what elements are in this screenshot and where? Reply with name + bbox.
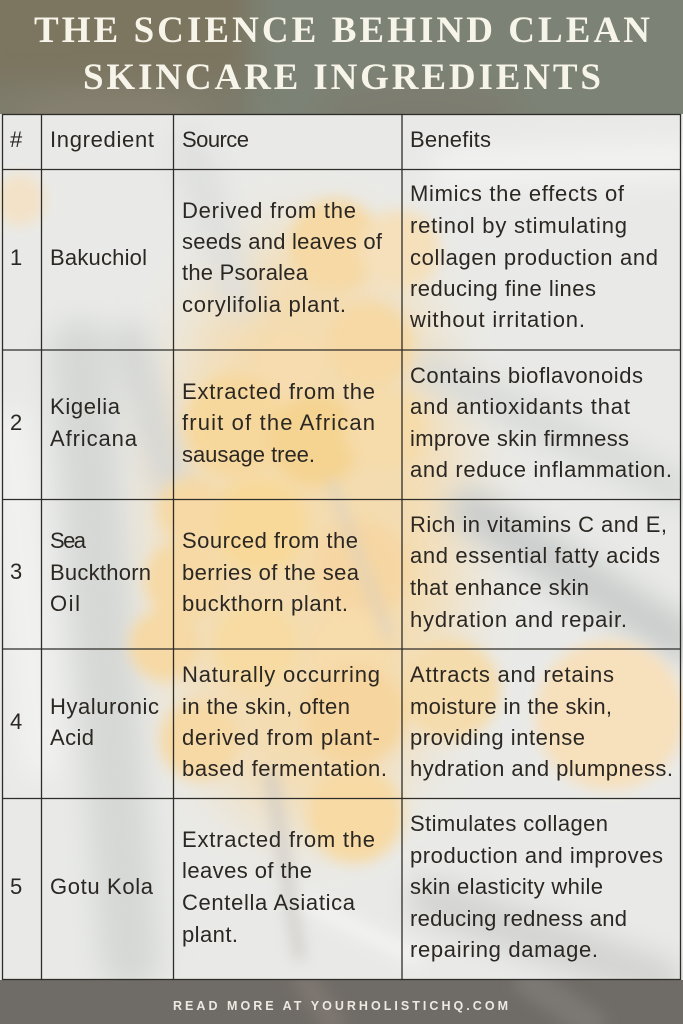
table header row: Ingredient: [50, 127, 154, 152]
benefits: Kigelia Africana: Contains bioflavonoids: [410, 363, 643, 388]
source: Sea Buckthorn Oil: buckthorn plant.: [182, 591, 348, 616]
row 2: Kigelia Africana: Africana: [50, 426, 138, 451]
row 3: Sea Buckthorn Oil: 3: [10, 559, 22, 584]
row 2: Kigelia Africana: 2: [10, 410, 22, 435]
benefits: Sea Buckthorn Oil: hydration and repair.: [410, 607, 627, 632]
footer band background: [0, 980, 683, 1024]
benefits: Hyaluronic Acid: hydration and plumpness.: [410, 756, 673, 781]
benefits: Gotu Kola: skin elasticity while: [410, 874, 603, 899]
source: Bakuchiol: Derived from the: [182, 198, 356, 223]
source: Sea Buckthorn Oil: [182, 528, 360, 616]
benefits: Gotu Kola: Stimulates collagen: [410, 811, 608, 836]
row 3: Sea Buckthorn Oil: Sea: [50, 528, 87, 553]
table header row: #: [10, 127, 23, 152]
benefits: Sea Buckthorn Oil: [410, 512, 667, 632]
source: Kigelia Africana: [182, 379, 375, 467]
source: Bakuchiol: [182, 198, 383, 317]
title: SKINCARE INGREDIENTS: [83, 57, 601, 98]
benefits: Sea Buckthorn Oil: Rich in vitamins C and E,: [410, 512, 667, 537]
benefits: Gotu Kola: [410, 811, 663, 962]
source: Gotu Kola: Extracted from the: [182, 827, 375, 852]
benefits: Kigelia Africana: and antioxidants that: [410, 394, 630, 419]
source: Gotu Kola: leaves of the: [182, 858, 312, 883]
benefits: Gotu Kola: reducing redness and: [410, 906, 627, 931]
row 1: Bakuchiol: Bakuchiol: [50, 245, 147, 270]
benefits: Hyaluronic Acid: moisture in the skin,: [410, 694, 612, 719]
row 3: Sea Buckthorn Oil: [10, 512, 667, 632]
row 2: Kigelia Africana: [10, 363, 672, 482]
row 4: Hyaluronic Acid: 4: [10, 709, 22, 734]
benefits: Hyaluronic Acid: Attracts and retains: [410, 662, 614, 687]
table header row: Benefits: [410, 127, 491, 152]
benefits: Bakuchiol: reducing fine lines: [410, 276, 596, 301]
source: Bakuchiol: the Psoralea: [182, 260, 309, 285]
source: Hyaluronic Acid: Naturally occurring: [182, 662, 380, 687]
source: Kigelia Africana: Extracted from the: [182, 379, 375, 404]
source: Gotu Kola: Centella Asiatica: [182, 890, 356, 915]
row 4: Hyaluronic Acid: Acid: [50, 725, 94, 750]
benefits: Gotu Kola: production and improves: [410, 843, 663, 868]
row 5: Gotu Kola: [10, 811, 663, 962]
source: Bakuchiol: corylifolia plant.: [182, 292, 346, 317]
row 3: Sea Buckthorn Oil: Buckthorn: [50, 560, 151, 585]
source: Bakuchiol: seeds and leaves of: [182, 229, 383, 254]
source: Gotu Kola: plant.: [182, 922, 238, 947]
source: Hyaluronic Acid: [182, 662, 387, 781]
row 1: Bakuchiol: 1: [10, 245, 22, 270]
row 1: Bakuchiol: [10, 181, 658, 332]
benefits: Kigelia Africana: [410, 363, 672, 482]
footer call to action: READ MORE AT YOURHOLISTICHQ.COM: [173, 999, 508, 1013]
table header row: [10, 127, 491, 152]
benefits: Hyaluronic Acid: [410, 662, 673, 781]
source: Hyaluronic Acid: based fermentation.: [182, 756, 387, 781]
row 4: Hyaluronic Acid: [10, 662, 673, 781]
row 5: Gotu Kola: 5: [10, 874, 22, 899]
source: Kigelia Africana: fruit of the African: [182, 410, 375, 435]
benefits: Bakuchiol: retinol by stimulating: [410, 213, 627, 238]
benefits: Bakuchiol: Mimics the effects of: [410, 181, 625, 206]
source: Hyaluronic Acid: in the skin, often: [182, 694, 350, 719]
row 4: Hyaluronic Acid: Hyaluronic: [50, 694, 159, 719]
row 5: Gotu Kola: Gotu Kola: [50, 874, 154, 899]
title: [34, 10, 650, 98]
benefits: Hyaluronic Acid: providing intense: [410, 725, 585, 750]
benefits: Sea Buckthorn Oil: that enhance skin: [410, 575, 589, 600]
benefits: Bakuchiol: collagen production and: [410, 245, 658, 270]
source: Gotu Kola: [182, 827, 375, 947]
source: Sea Buckthorn Oil: berries of the sea: [182, 560, 360, 585]
source: Kigelia Africana: sausage tree.: [182, 442, 315, 467]
benefits: Bakuchiol: [409, 181, 658, 332]
title: THE SCIENCE BEHIND CLEAN: [34, 10, 650, 51]
title band background: [0, 0, 683, 114]
source: Hyaluronic Acid: derived from plant-: [182, 725, 380, 750]
benefits: Kigelia Africana: and reduce inflammation.: [410, 457, 672, 482]
benefits: Sea Buckthorn Oil: and essential fatty acids: [410, 543, 660, 568]
source: Sea Buckthorn Oil: Sourced from the: [182, 528, 358, 553]
row 3: Sea Buckthorn Oil: Oil: [50, 591, 80, 616]
row 2: Kigelia Africana: Kigelia: [50, 394, 121, 419]
benefits: Kigelia Africana: improve skin firmness: [410, 426, 629, 451]
benefits: Gotu Kola: repairing damage.: [410, 937, 598, 962]
table header row: Source: [182, 127, 249, 152]
benefits: Bakuchiol: without irritation.: [409, 307, 585, 332]
